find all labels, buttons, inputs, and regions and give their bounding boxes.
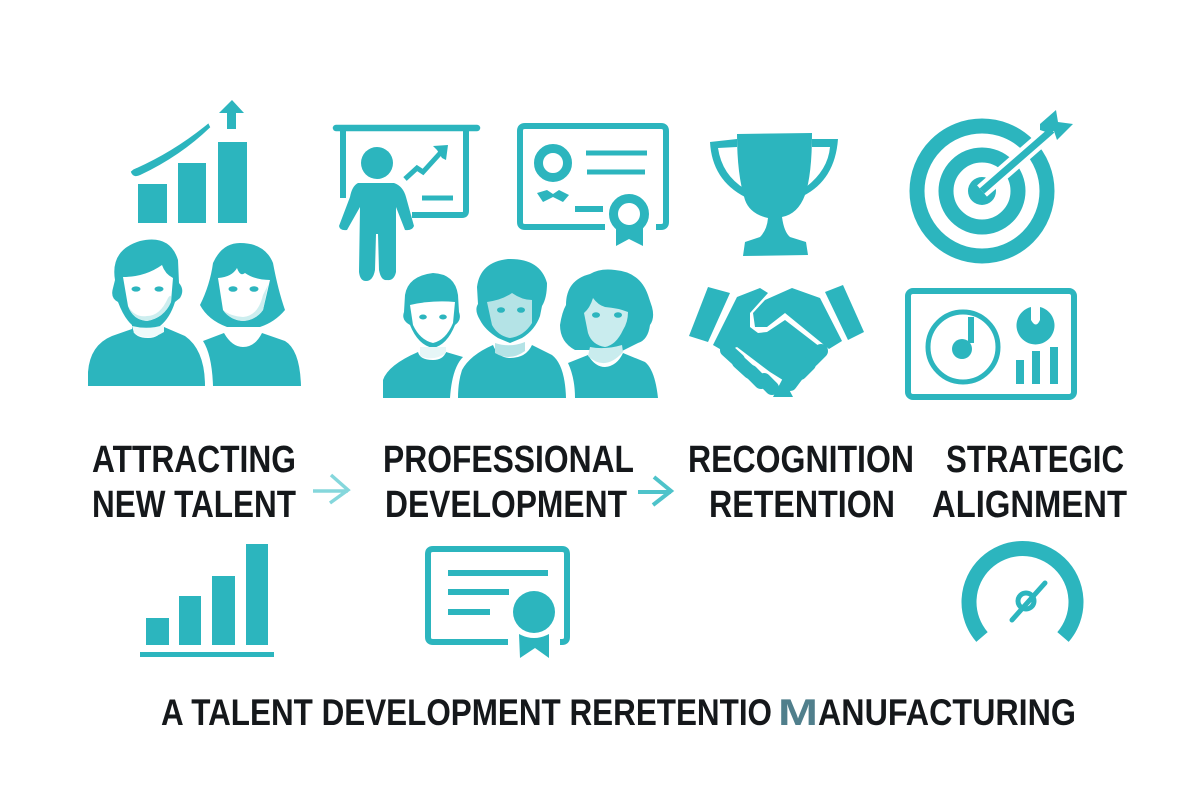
label: attracting new talent (92, 439, 296, 526)
bottom title: ANUFACTURING (818, 692, 1076, 733)
label: professional development (383, 439, 634, 526)
label: strategic alignment: STRATEGIC (946, 439, 1124, 481)
bottom title: A TALENT DEVELOPMENT RERETENTIO (161, 692, 772, 733)
label: strategic alignment (932, 439, 1127, 526)
icon: target with arrow (917, 110, 1073, 256)
bottom title: M (778, 692, 818, 733)
label: attracting new talent: NEW TALENT (92, 484, 296, 526)
arrow: to recognition retention (638, 477, 671, 505)
icon: certificate large (520, 126, 666, 246)
label: attracting new talent: ATTRACTING (92, 439, 296, 481)
icon: three people (383, 259, 658, 398)
icon: dashboard panel (908, 291, 1074, 397)
icon: handshake (689, 285, 864, 397)
icon: small certificate (428, 549, 567, 658)
label: professional development: DEVELOPMENT (385, 484, 627, 526)
icon: trophy (710, 133, 838, 256)
label: recognition retention (688, 439, 914, 526)
label: recognition retention: RECOGNITION (688, 439, 914, 481)
icon: two people (88, 240, 301, 386)
icon: presenter at board (336, 128, 477, 281)
label: recognition retention: RETENTION (709, 484, 895, 526)
label: strategic alignment: ALIGNMENT (932, 484, 1127, 526)
arrow: to professional development (313, 475, 348, 503)
icon: small bar chart (140, 544, 274, 657)
icon: rising bar chart with arrow (132, 100, 247, 223)
label: professional development: PROFESSIONAL (383, 439, 634, 481)
icon: gauge (969, 549, 1076, 637)
